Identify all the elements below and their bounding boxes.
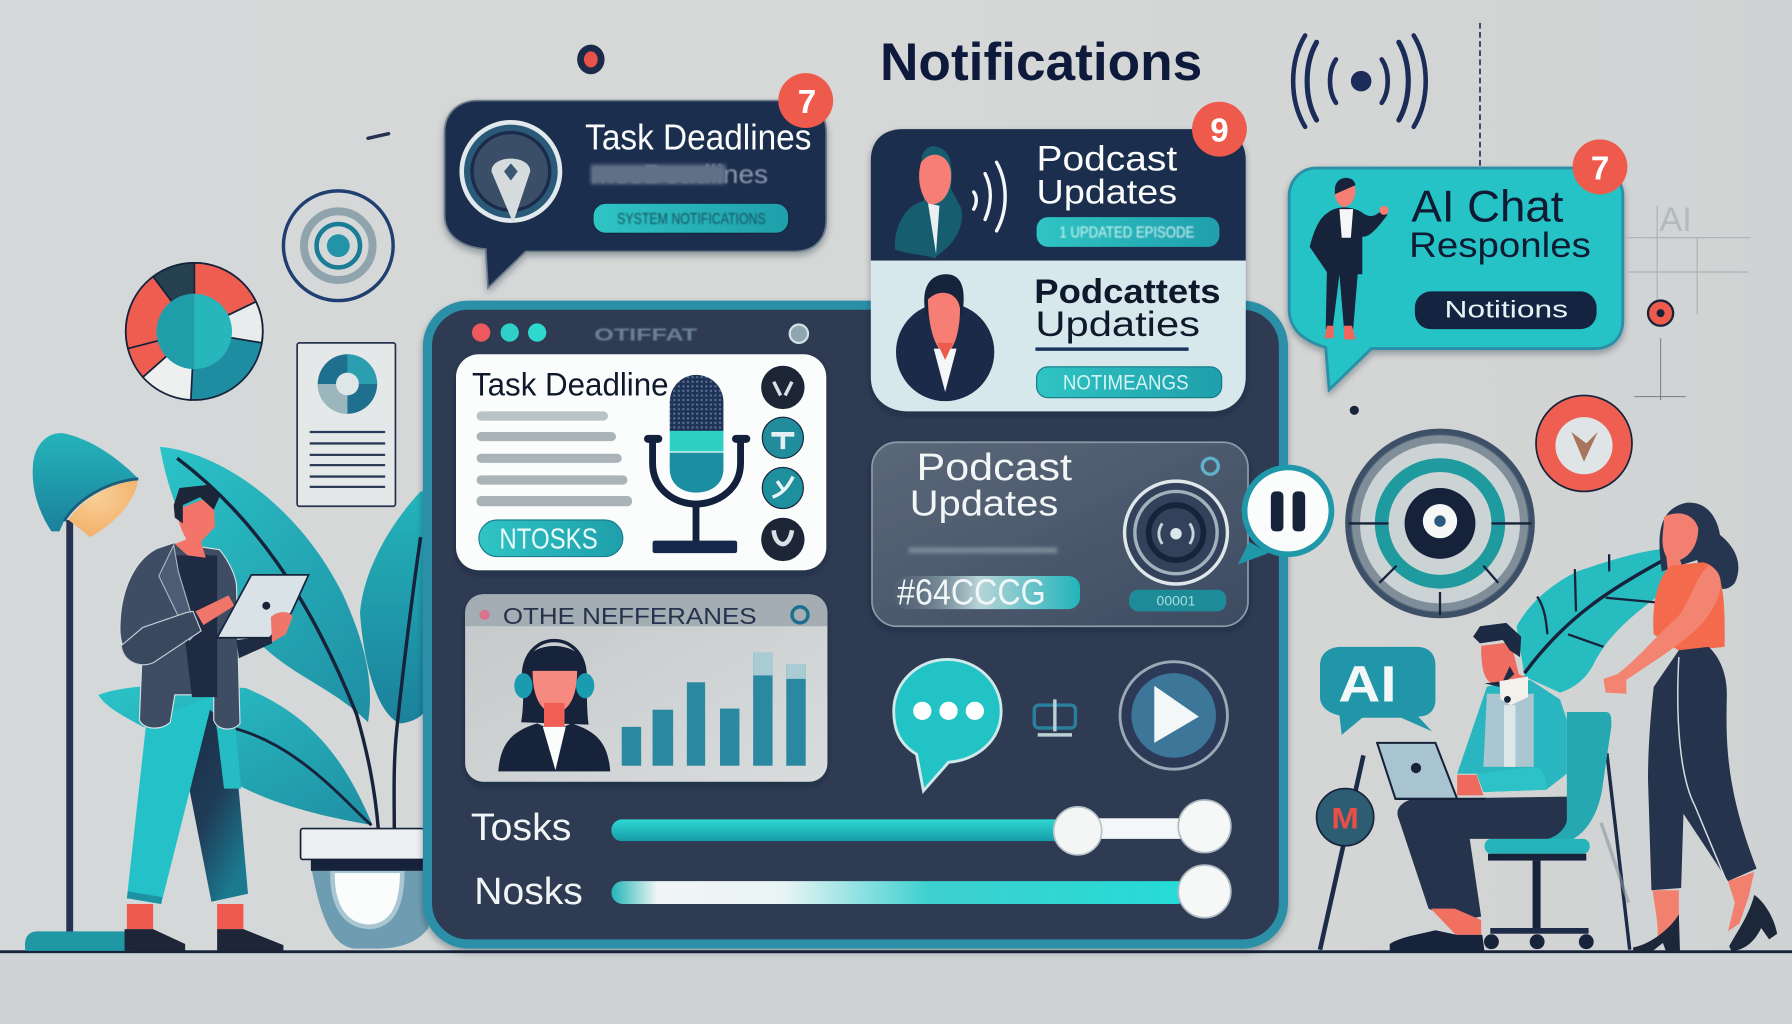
- window controls: OTIFFAT: [594, 325, 698, 345]
- person: seated man with laptop: [1377, 623, 1567, 952]
- slider: tasks: Tosks: [471, 806, 571, 848]
- faded text line: [909, 547, 1057, 553]
- heading: [1037, 138, 1177, 211]
- card: task deadline: [456, 354, 826, 570]
- icon: standing person: [1310, 178, 1389, 339]
- card header: OTHE NEFFERANES: [503, 603, 757, 629]
- rear leg and shoe: [190, 695, 283, 951]
- person: walking woman: [1603, 503, 1777, 952]
- icon: red round badge: [1536, 395, 1632, 491]
- heading: AI Chat: [1411, 183, 1564, 232]
- heading: Updates: [1037, 173, 1177, 211]
- slider: notes: [474, 865, 1231, 918]
- podcast card upper content: [895, 102, 1247, 258]
- side icon buttons: [761, 366, 805, 561]
- badge: [1573, 139, 1627, 194]
- floor lamp: [25, 433, 138, 951]
- slider: tasks: [471, 800, 1231, 855]
- small red indicator: [1648, 301, 1673, 326]
- trousers: [1648, 647, 1757, 890]
- faint diagram, right: [1626, 201, 1751, 400]
- card heading: [910, 446, 1073, 523]
- heading: Responles: [1409, 225, 1591, 265]
- pie chart: [126, 263, 263, 400]
- button: Notitions: [1445, 297, 1568, 324]
- legs: [1397, 797, 1567, 921]
- far sleeve: [237, 635, 274, 658]
- background leaf, right: [1517, 549, 1666, 693]
- small mark: [368, 134, 389, 138]
- office chair: [1484, 712, 1630, 950]
- small dot: [1350, 406, 1359, 415]
- button: [593, 203, 789, 233]
- plant behind man and panel: [98, 447, 425, 829]
- card heading: Podcast: [917, 446, 1073, 488]
- shirt: [1457, 680, 1567, 792]
- window controls: [472, 323, 808, 345]
- badge: 7: [798, 84, 816, 121]
- hands: [1457, 775, 1483, 795]
- heels: [1633, 914, 1680, 952]
- icon: pause bubble: [1238, 467, 1331, 565]
- title: Notifications: [880, 33, 1202, 92]
- AI speech bubble: AI: [1338, 655, 1397, 713]
- card: podcast updates dark: [872, 442, 1248, 626]
- icon: play button: [1120, 662, 1227, 769]
- icon: chat bubble with dots: [894, 659, 1001, 791]
- document with chart: [297, 343, 395, 506]
- icon: left target rings: [283, 191, 393, 301]
- top: [1653, 562, 1725, 651]
- card button: NTOSKS: [499, 524, 598, 556]
- icon: speaker circle: [1125, 481, 1227, 584]
- card heading: Task Deadline: [472, 366, 669, 402]
- plant pot: [301, 829, 429, 949]
- slider: notes: Nosks: [474, 870, 583, 912]
- laptop: [1377, 743, 1486, 799]
- badge: 7: [1591, 150, 1609, 187]
- icon: small red dot: [577, 45, 605, 74]
- button: [1037, 367, 1222, 398]
- heading: Podcast: [1037, 138, 1177, 178]
- notification: AI chat responses: [1289, 139, 1627, 390]
- podcast card lower content: [896, 273, 1222, 401]
- card heading: Updates: [910, 482, 1058, 523]
- button: SYSTEM NOTIFICATIONS: [617, 211, 766, 228]
- small pill: [1129, 590, 1226, 611]
- small pole with red badge: [1317, 755, 1374, 950]
- heading: [1409, 183, 1591, 265]
- button: [1037, 217, 1219, 247]
- icon: broadcast signal: [1293, 35, 1426, 127]
- front leg and shoe: [125, 695, 214, 951]
- badge: 9: [1210, 113, 1229, 150]
- icon: microphone: [648, 375, 746, 553]
- shirt: [175, 555, 217, 697]
- icon: person portrait: [896, 274, 994, 401]
- back calf: [1653, 890, 1679, 944]
- small pill: 00001: [1157, 594, 1195, 609]
- lapel: [159, 545, 197, 640]
- heading: [1034, 273, 1221, 344]
- head: [1473, 623, 1528, 705]
- bar chart: [622, 653, 806, 766]
- value pill: #64CCCG: [897, 572, 1046, 613]
- badge: [1192, 102, 1247, 157]
- woman with headphones: [498, 641, 610, 771]
- card header: [465, 594, 827, 629]
- button: NOTIMEANGS: [1063, 370, 1189, 395]
- tablet and hands: [195, 575, 309, 642]
- icon: target dial: [1349, 432, 1531, 615]
- icon: speaking person: [895, 146, 1005, 258]
- hair: [1659, 503, 1738, 589]
- notification: task deadlines: [445, 73, 833, 288]
- person: man with tablet: [120, 485, 309, 951]
- icon: location badge: [462, 122, 560, 223]
- dashed hanging line: [1479, 23, 1481, 167]
- button: [1415, 291, 1597, 329]
- blurred subtext: mesDeadlines: [591, 159, 768, 189]
- heading: Podcattets: [1034, 273, 1221, 311]
- main app panel: [427, 305, 1283, 944]
- badge: [778, 73, 833, 128]
- small pole with red badge: M: [1331, 803, 1359, 836]
- head: [174, 485, 219, 558]
- small refresh icon: [1202, 458, 1218, 474]
- notification: podcast updates stacked: [871, 129, 1246, 411]
- neck and face: [1663, 513, 1698, 577]
- arm and hand: [1603, 566, 1721, 694]
- button: 1 UPDATED EPISODE: [1059, 225, 1194, 242]
- card: audio chart: [465, 594, 827, 782]
- heading: Updaties: [1035, 304, 1200, 344]
- heading: Task Deadlines: [585, 117, 811, 158]
- jacket: [120, 543, 240, 729]
- text lines: [477, 411, 632, 506]
- near sleeve: [121, 611, 201, 665]
- faint diagram, right: AI: [1659, 201, 1692, 239]
- shoe: [1390, 930, 1485, 952]
- small equalizer glyph: [1034, 699, 1075, 735]
- AI speech bubble: [1320, 647, 1435, 735]
